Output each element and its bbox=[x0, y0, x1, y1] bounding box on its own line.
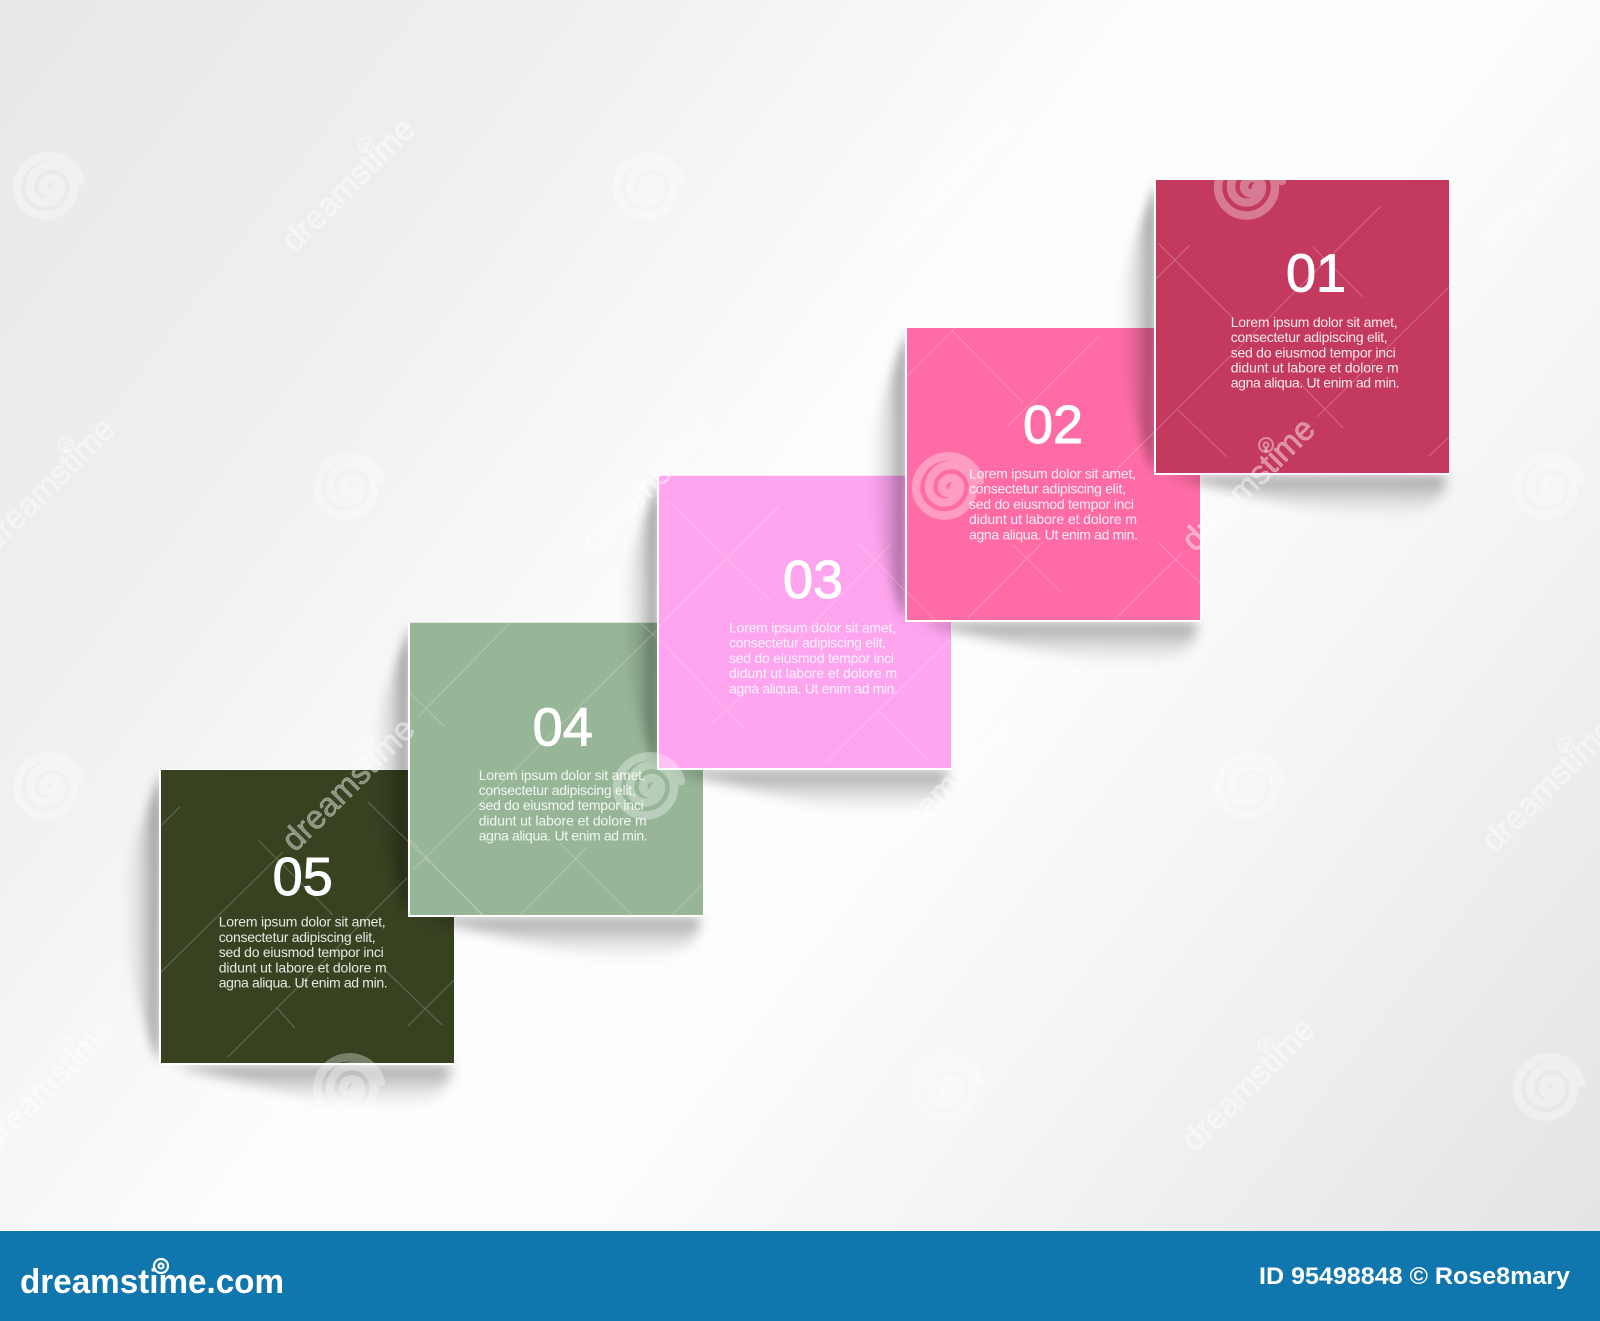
card 04 bbox=[374, 622, 704, 959]
card 02 text: didunt ut labore et dolore m bbox=[969, 511, 1137, 527]
card 04 left shadow bbox=[374, 625, 410, 915]
card 01 text bbox=[1231, 314, 1400, 391]
card 01 text: didunt ut labore et dolore m bbox=[1231, 360, 1399, 376]
watermark small rings bbox=[59, 138, 1573, 1052]
card 05 panel bbox=[159, 769, 455, 1065]
card 02 text: consectetur adipiscing elit, bbox=[969, 481, 1126, 497]
card 03 panel bbox=[657, 475, 952, 770]
watermark wordmarks: dreamstime bbox=[274, 710, 422, 858]
card 01 text: sed do eiusmod tempor inci bbox=[1231, 344, 1396, 360]
card 02 panel bbox=[905, 328, 1201, 622]
card 02 bottom shadow bbox=[919, 622, 1197, 664]
card 03 number: 03 bbox=[783, 550, 843, 610]
watermark wordmarks: dreamstime bbox=[874, 710, 1022, 858]
card 03 text: Lorem ipsum dolor sit amet, bbox=[729, 620, 896, 636]
card 05 text: Lorem ipsum dolor sit amet, bbox=[219, 914, 386, 930]
card 01 panel bbox=[1154, 180, 1450, 475]
card 03 text: agna aliqua. Ut enim ad min. bbox=[729, 680, 898, 696]
card 03 bottom shadow bbox=[671, 770, 948, 812]
card 03 text bbox=[729, 620, 898, 696]
card 04 text: didunt ut labore et dolore m bbox=[479, 812, 647, 828]
card 01 text: Lorem ipsum dolor sit amet, bbox=[1231, 314, 1398, 330]
card 05 text: agna aliqua. Ut enim ad min. bbox=[219, 974, 388, 990]
card 02 number: 02 bbox=[1023, 395, 1083, 455]
watermark wordmarks: dreamstime bbox=[574, 1010, 722, 1158]
card 05 text: didunt ut labore et dolore m bbox=[219, 959, 387, 975]
watermark wordmarks: dreamstime bbox=[274, 110, 422, 258]
card 04 bottom shadow bbox=[422, 917, 700, 959]
card 03 text: sed do eiusmod tempor inci bbox=[729, 650, 894, 666]
card 01 left shadow bbox=[1120, 182, 1156, 473]
card 01 bbox=[1120, 180, 1450, 517]
card 02 text bbox=[969, 466, 1138, 542]
card 05 text: sed do eiusmod tempor inci bbox=[219, 944, 384, 960]
card 05 left shadow bbox=[125, 772, 161, 1063]
card 02 bbox=[871, 328, 1201, 664]
card 04 text: sed do eiusmod tempor inci bbox=[479, 797, 644, 813]
card 05 bottom shadow bbox=[173, 1065, 451, 1107]
card 03 text: consectetur adipiscing elit, bbox=[729, 635, 886, 651]
footer logo spiral bbox=[154, 1259, 168, 1273]
card 02 text: agna aliqua. Ut enim ad min. bbox=[969, 526, 1138, 542]
watermark wordmarks: dreamstime bbox=[874, 110, 1022, 258]
footer bar bbox=[0, 1231, 1600, 1321]
card 01 number: 01 bbox=[1286, 244, 1346, 304]
watermark crossing lines bbox=[161, 207, 1449, 1057]
card 01 text: agna aliqua. Ut enim ad min. bbox=[1231, 375, 1400, 391]
card 04 text: consectetur adipiscing elit, bbox=[479, 782, 636, 798]
watermark wordmarks: dreamstime bbox=[1174, 410, 1322, 558]
watermark wordmarks: dreamstime bbox=[1174, 1010, 1322, 1158]
card 05 text: consectetur adipiscing elit, bbox=[219, 929, 376, 945]
watermark wordmarks: dreamstime bbox=[574, 410, 722, 558]
card 04 text bbox=[479, 767, 648, 844]
card 01 bottom shadow bbox=[1168, 475, 1446, 517]
card 02 text: Lorem ipsum dolor sit amet, bbox=[969, 466, 1136, 482]
card 03 left shadow bbox=[623, 478, 659, 768]
card 05 bbox=[125, 769, 455, 1107]
card 02 text: sed do eiusmod tempor inci bbox=[969, 496, 1134, 512]
watermark wordmarks bbox=[0, 110, 1600, 1158]
card 04 number: 04 bbox=[533, 698, 593, 758]
footer logo text: dreamstime.com bbox=[20, 1263, 284, 1301]
card 04 panel bbox=[408, 622, 704, 917]
card 03 bbox=[623, 475, 952, 812]
card 05 number: 05 bbox=[273, 847, 333, 907]
footer image id and credit: ID 95498848 © Rose8mary bbox=[1259, 1263, 1571, 1290]
card 04 text: Lorem ipsum dolor sit amet, bbox=[479, 767, 646, 783]
card 04 text: agna aliqua. Ut enim ad min. bbox=[479, 828, 648, 844]
card 01 text: consectetur adipiscing elit, bbox=[1231, 329, 1388, 345]
watermark spirals bbox=[17, 156, 1581, 1116]
card 05 text bbox=[219, 914, 388, 990]
card 02 left shadow bbox=[871, 330, 907, 620]
card 03 text: didunt ut labore et dolore m bbox=[729, 665, 897, 681]
